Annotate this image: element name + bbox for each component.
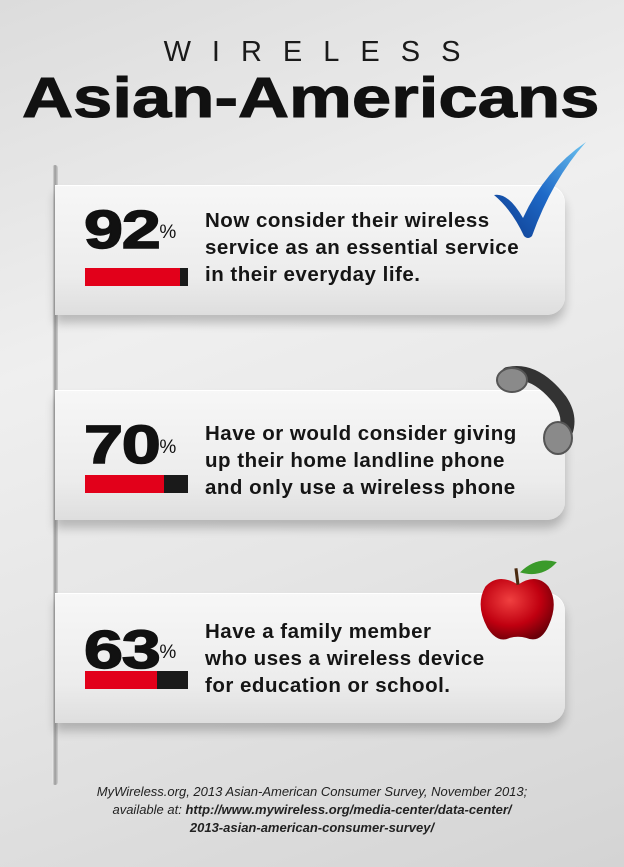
source citation: available at: http://www.mywireless.org/media-center/data-center/ [112,802,512,817]
title: Asian-Americans: Asian-Americans [22,66,599,130]
stat number 70: 70 [84,415,160,475]
icon: apple [480,560,557,640]
text 63 [205,620,485,697]
stat number 63: 63 [84,620,160,680]
icon: phone handset [496,366,574,455]
source citation: 2013-asian-american-consumer-survey/ [190,820,434,835]
panel: 63% [50,560,570,736]
text 63: Have a family member [205,620,432,643]
text 63: for education or school. [205,674,450,697]
source citation [97,784,527,835]
panel: 70% [50,366,574,533]
stat number 63: % [160,642,175,663]
bar 92 [85,268,188,286]
stat number 70: % [160,437,175,458]
text 70: Have or would consider giving [205,422,517,445]
text 70 [205,422,517,499]
text 92: service as an essential service [205,236,519,259]
text 92 [205,209,519,286]
icon: checkmark [494,142,586,238]
stat number 92: 92 [84,200,160,260]
text 92: in their everyday life. [205,263,420,286]
vertical rail [52,165,58,785]
text 63: who uses a wireless device [205,647,485,670]
bar 63 [85,671,188,689]
stat number 92: % [160,222,175,243]
text 70: and only use a wireless phone [205,476,516,499]
title: WIRELESS: WIRELESS [164,36,481,68]
panel: 92% [50,142,586,328]
text 92: Now consider their wireless [205,209,490,232]
text 70: up their home landline phone [205,449,505,472]
bar 70 [85,475,188,493]
source citation: MyWireless.org, 2013 Asian-American Consumer Survey, November 2013; [97,784,527,799]
